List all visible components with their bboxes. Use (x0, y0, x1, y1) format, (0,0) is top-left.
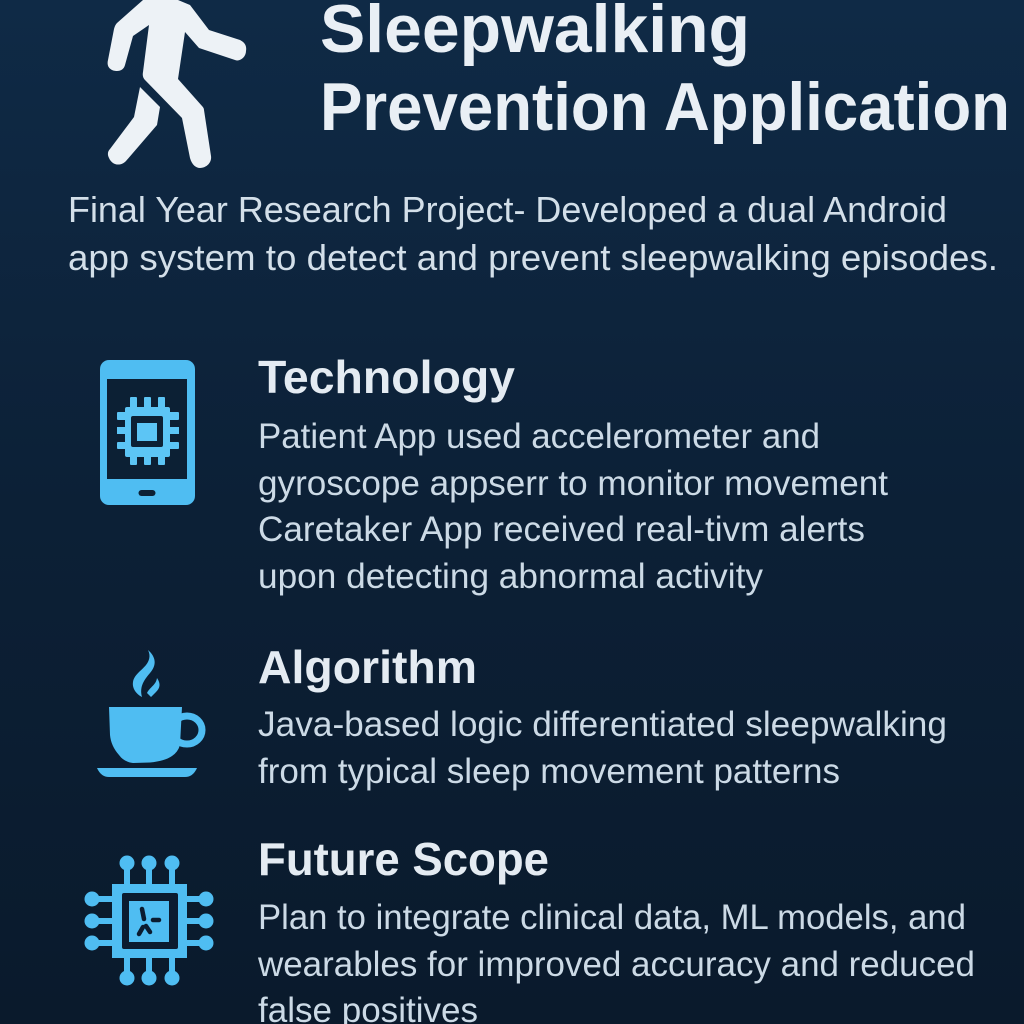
text: technology details (258, 417, 888, 596)
title (320, 0, 1010, 145)
subtitle: app system to detect and prevent sleepwalking episodes. (68, 237, 998, 278)
subtitle: Final Year Research Project- Developed a dual Android (68, 189, 947, 230)
text: algorithm details (258, 705, 947, 791)
text: algorithm details: from typical sleep movement patterns (258, 752, 840, 791)
text: technology details: gyroscope appserr to monitor movement (258, 464, 888, 503)
icon: phone with chip (100, 360, 195, 505)
heading: algorithm: Algorithm (258, 641, 477, 693)
text: technology details: Caretaker App received real-tivm alerts (258, 510, 865, 549)
section: technology (258, 351, 888, 596)
text: future scope details (257, 898, 975, 1024)
subtitle (68, 189, 998, 278)
section: algorithm (258, 641, 947, 791)
icon: walking person (108, 0, 246, 168)
icon: processor chip (84, 856, 214, 986)
text: technology details: Patient App used accelerometer and (258, 417, 820, 456)
text: technology details: upon detecting abnormal activity (258, 557, 763, 596)
heading: future scope: Future Scope (258, 833, 549, 885)
text: future scope details: Plan to integrate clinical data, ML models, and (258, 898, 966, 937)
icon: coffee cup (97, 650, 202, 777)
text: algorithm details: Java-based logic differentiated sleepwalking (258, 705, 947, 744)
text: future scope details: wearables for improved accuracy and reduced (257, 945, 975, 984)
section: future scope (257, 833, 975, 1024)
heading: technology: Technology (258, 351, 515, 403)
